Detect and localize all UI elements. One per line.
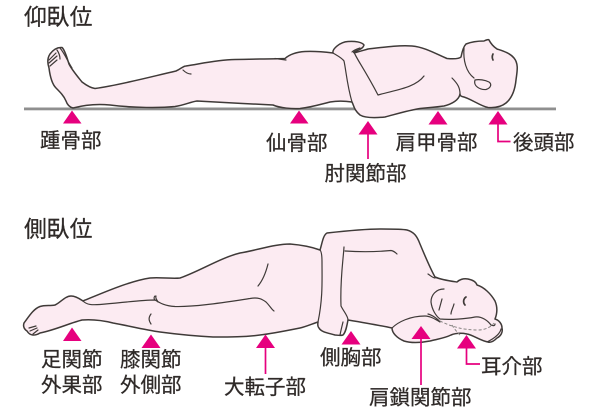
marker: scapula xyxy=(396,111,478,154)
marker: greater trochanter xyxy=(224,334,306,399)
marker: knee xyxy=(120,334,182,397)
illustration: supine body xyxy=(48,40,517,118)
label: knee second line: 外側部 xyxy=(120,374,182,397)
supine inner lines: knee, arm, neck, ear, toes xyxy=(275,58,286,60)
label: greater trochanter: 大転子部 xyxy=(224,376,306,399)
label: auricle: 耳介部 xyxy=(481,356,542,378)
marker: sacrum xyxy=(266,110,328,155)
heading: supine position: 仰臥位 xyxy=(24,4,92,30)
label: heel: 踵骨部 xyxy=(40,130,102,152)
label: lateral chest: 側胸部 xyxy=(320,346,382,370)
label: ankle outer: 足関節 xyxy=(41,348,102,372)
label: scapula: 肩甲骨部 xyxy=(396,132,478,154)
marker: auricle xyxy=(457,335,542,378)
heading: lateral position: 側臥位 xyxy=(24,216,92,242)
label: sacrum: 仙骨部 xyxy=(266,132,328,155)
marker: lateral malleolus xyxy=(41,328,102,397)
supine body outline xyxy=(48,40,517,118)
lateral inner lines: legs, knee, arm, face, ear, toes xyxy=(83,298,274,311)
illustration: lateral body xyxy=(24,229,502,342)
label: acromioclavicular joint: 肩鎖関節部 xyxy=(369,386,472,410)
marker: heel xyxy=(40,110,102,152)
hidden ear dashed outline xyxy=(440,321,494,335)
marker: elbow xyxy=(324,121,406,186)
supine surface line xyxy=(24,108,556,110)
lateral body outline xyxy=(24,229,502,342)
marker: acromioclavicular joint xyxy=(369,326,472,410)
marker: lateral chest xyxy=(320,331,382,370)
marker: occiput xyxy=(488,111,574,154)
label: elbow: 肘関節部 xyxy=(324,162,406,186)
label: ankle outer second line: 外果部 xyxy=(41,374,102,397)
label: occiput: 後頭部 xyxy=(513,132,574,154)
label: knee: 膝関節 xyxy=(120,348,182,372)
